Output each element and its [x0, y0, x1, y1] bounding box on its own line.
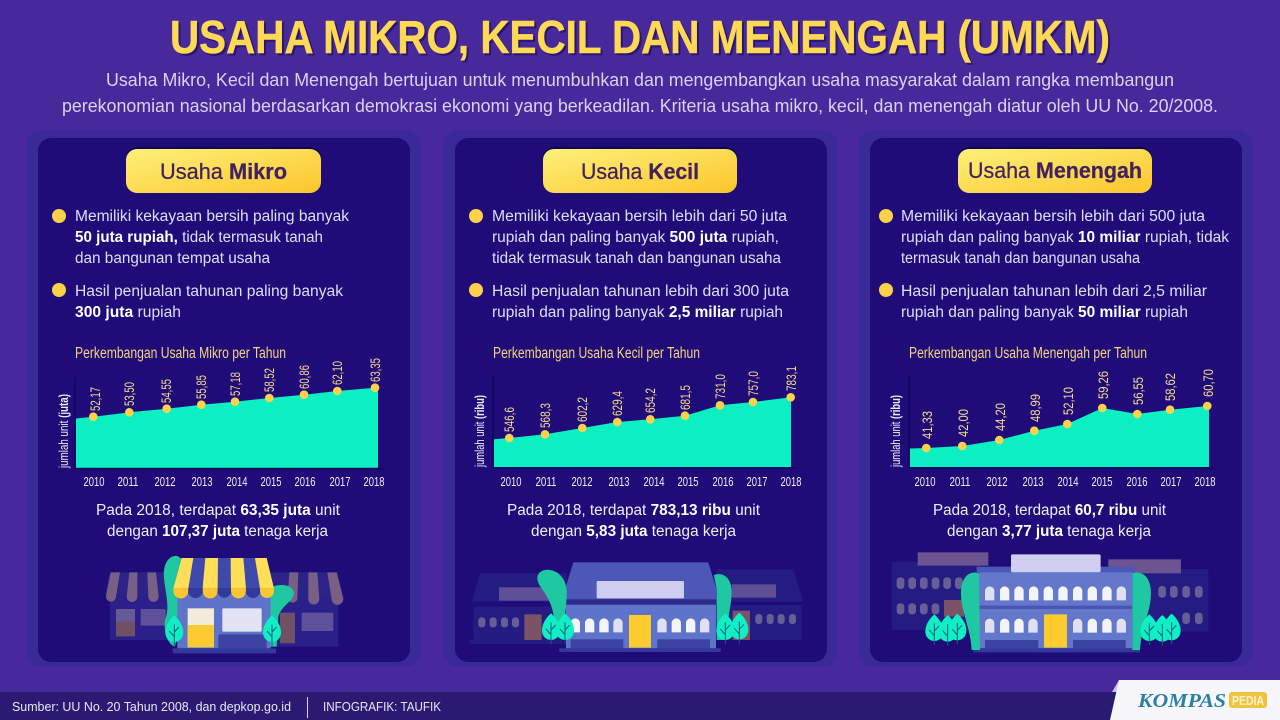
title: USAHA MIKRO, KECIL DAN MENENGAH (UMKM) [170, 11, 1110, 63]
panel: usaha kecil [443, 130, 838, 667]
area chart: menengah: 2014 [1058, 474, 1078, 489]
bullet: kekayaan mikro [52, 208, 349, 267]
bullet: kekayaan kecil: Memiliki kekayaan bersih lebih dari 50 juta [492, 208, 787, 225]
area chart: mikro: 53,50 [121, 382, 137, 406]
badge: usaha menengah: Usaha Menengah [968, 158, 1142, 183]
bullet: kekayaan kecil: tidak termasuk tanah dan bangunan usaha [492, 250, 781, 267]
bullet: kekayaan menengah: termasuk tanah dan bangunan usaha [901, 250, 1140, 267]
arched windows [985, 586, 1126, 633]
area chart: menengah: 2016 [1126, 474, 1148, 489]
bullet: penjualan menengah [879, 283, 1207, 321]
bullet: kekayaan mikro: Memiliki kekayaan bersih paling banyak [75, 208, 349, 225]
area chart: kecil: 2016 [712, 474, 734, 489]
logo: kompas pedia [1110, 680, 1280, 720]
bullet: penjualan mikro: Hasil penjualan tahunan paling banyak [75, 283, 343, 300]
window [222, 608, 262, 632]
area chart: menengah: 56,55 [1130, 377, 1146, 405]
door [188, 608, 214, 647]
summary: mikro: Pada 2018, terdapat 63,35 juta unit [96, 502, 341, 519]
area chart: kecil: 2015 [678, 474, 698, 489]
footer bar [0, 692, 1125, 720]
area chart: mikro: 2010 [84, 474, 104, 489]
chart title: kecil: Perkembangan Usaha Kecil per Tahun [493, 345, 700, 362]
area chart: menengah: 2010 [914, 474, 936, 489]
area chart: menengah: 2011 [950, 474, 970, 489]
tree left [165, 615, 183, 646]
area chart: mikro: 2014 [226, 474, 248, 489]
area chart: kecil: 2013 [608, 474, 630, 489]
area chart: menengah: 2013 [1022, 474, 1044, 489]
badge: usaha menengah [958, 147, 1152, 193]
credit text: INFOGRAFIK: TAUFIK [323, 700, 442, 714]
area chart: menengah: 41,33 [919, 411, 935, 439]
summary: mikro: dengan 107,37 juta tenaga kerja [107, 523, 328, 540]
door [629, 615, 651, 648]
bullet: kekayaan mikro: 50 juta rupiah, tidak termasuk tanah [75, 229, 323, 246]
arched windows [571, 618, 709, 632]
area chart: mikro: 57,18 [227, 372, 243, 396]
chart title: mikro: Perkembangan Usaha Mikro per Tahun [75, 345, 286, 362]
bullet: penjualan mikro [52, 283, 343, 321]
area chart: kecil: 2018 [780, 474, 802, 489]
area chart: mikro: 2015 [260, 474, 282, 489]
panel: usaha mikro [26, 130, 421, 667]
intro text: Usaha Mikro, Kecil dan Menengah bertujuan untuk menumbuhkan dan mengembangkan usaha masyarakat dalam rangka membangun [106, 70, 1174, 90]
roof and sign [977, 554, 1135, 573]
summary: menengah: Pada 2018, terdapat 60,7 ribu unit [933, 502, 1167, 519]
tree right [263, 615, 281, 646]
roof and sign [562, 562, 720, 600]
area chart: mikro: 55,85 [193, 375, 209, 399]
plant: left leaf [537, 570, 567, 633]
area chart: kecil: 602,2 [574, 397, 590, 422]
area chart: kecil: 2012 [572, 474, 592, 489]
area chart: mikro: 2011 [118, 474, 138, 489]
area chart: mikro: 62,10 [329, 361, 345, 385]
logo: kompas pedia: KOMPAS [1137, 690, 1226, 712]
area chart: mikro: 2012 [154, 474, 176, 489]
panel: usaha menengah [858, 130, 1253, 667]
summary: menengah: dengan 3,77 juta tenaga kerja [947, 523, 1151, 540]
area chart: kecil: 783,1 [783, 366, 799, 391]
badge: usaha mikro: Usaha Mikro [160, 159, 287, 184]
bullet: kekayaan kecil [469, 208, 787, 267]
bullet: kekayaan menengah [879, 208, 1229, 267]
trees left [542, 613, 574, 644]
intro text: perekonomian nasional berdasarkan demokrasi ekonomi yang berkeadilan. Kriteria usaha mikro, kecil, dan menengah diatur oleh UU No. 20/2008. [62, 96, 1218, 116]
summary: kecil: Pada 2018, terdapat 783,13 ribu unit [507, 502, 761, 519]
area chart: kecil: 681,5 [677, 385, 693, 410]
illustration: small shop [105, 556, 344, 653]
area chart: menengah [889, 369, 1216, 489]
area chart: mikro: 2013 [192, 474, 212, 489]
plant: left leaf [164, 556, 183, 647]
area chart: menengah: 2012 [986, 474, 1008, 489]
plant: right leaf [1132, 572, 1151, 650]
plant: right leaf [270, 585, 294, 647]
area chart: kecil: 2017 [746, 474, 768, 489]
area chart: menengah: 59,26 [1095, 371, 1111, 399]
area chart: mikro: 60,86 [296, 365, 312, 389]
chart title: menengah: Perkembangan Usaha Menengah per Tahun [909, 345, 1147, 362]
area chart: kecil: 757,0 [745, 371, 761, 396]
summary: menengah [933, 502, 1167, 540]
area chart: menengah: 2018 [1194, 474, 1216, 489]
area chart: mikro: 2017 [330, 474, 350, 489]
area chart: mikro: jumlah unit (juta) [57, 394, 71, 469]
area chart: mikro: 54,55 [158, 379, 174, 403]
bullet: penjualan kecil: Hasil penjualan tahunan lebih dari 300 juta [492, 283, 789, 300]
area chart: kecil: 2011 [536, 474, 556, 489]
area chart: kecil: 629,4 [609, 391, 625, 416]
area chart: menengah: 58,62 [1162, 373, 1178, 401]
area chart: menengah: 52,10 [1060, 387, 1076, 415]
area chart: kecil: 2014 [644, 474, 664, 489]
area chart: mikro: 63,35 [367, 358, 383, 382]
area chart: menengah: 48,99 [1027, 394, 1043, 422]
awning [173, 558, 274, 598]
area chart: kecil [473, 366, 802, 489]
area chart: mikro: 58,52 [261, 368, 277, 392]
door [1044, 614, 1067, 648]
area chart: menengah: jumlah unit (ribu) [889, 395, 903, 468]
area chart: menengah: 60,70 [1200, 369, 1216, 397]
intro text [62, 70, 1218, 116]
bullet: kekayaan menengah: Memiliki kekayaan bersih lebih dari 500 juta [901, 208, 1205, 225]
area chart: mikro: 2018 [364, 474, 384, 489]
bullet: penjualan kecil [469, 283, 789, 321]
plant: right leaf [714, 574, 732, 640]
illustration: small business building [469, 562, 803, 652]
area chart: kecil: 2010 [500, 474, 522, 489]
area chart: kecil: jumlah unit (ribu) [473, 395, 487, 468]
bullet: kekayaan kecil: rupiah dan paling banyak 500 juta rupiah, [492, 229, 779, 246]
bullet: kekayaan mikro: dan bangunan tempat usaha [75, 250, 270, 267]
area chart: kecil: 731,0 [712, 374, 728, 399]
badge: usaha mikro [126, 147, 321, 193]
summary: kecil: dengan 5,83 juta tenaga kerja [531, 523, 736, 540]
trees right [716, 613, 748, 644]
area chart: mikro [57, 358, 384, 489]
logo: kompas pedia: PEDIA [1232, 694, 1264, 708]
area chart: menengah: 44,20 [992, 403, 1008, 431]
badge: usaha kecil [543, 147, 737, 193]
plant: left leaf [961, 572, 980, 650]
bullet: penjualan menengah: Hasil penjualan tahunan lebih dari 2,5 miliar [901, 283, 1207, 300]
bullet: penjualan kecil: rupiah dan paling banyak 2,5 miliar rupiah [492, 304, 783, 321]
summary: kecil [507, 502, 761, 540]
area chart: mikro: 52,17 [87, 387, 103, 411]
area chart: menengah: 2015 [1092, 474, 1112, 489]
trees left [925, 614, 966, 646]
bullet: kekayaan menengah: rupiah dan paling banyak 10 miliar rupiah, tidak [901, 229, 1229, 246]
area chart: menengah: 42,00 [955, 409, 971, 437]
area chart: menengah: 2017 [1160, 474, 1182, 489]
trees right [1140, 614, 1181, 646]
bullet: penjualan mikro: 300 juta rupiah [75, 304, 181, 321]
source text: Sumber: UU No. 20 Tahun 2008, dan depkop.go.id [12, 700, 291, 714]
bullet: penjualan menengah: rupiah dan paling banyak 50 miliar rupiah [901, 304, 1188, 321]
area chart: mikro: 2016 [294, 474, 316, 489]
badge: usaha kecil: Usaha Kecil [581, 159, 699, 184]
area chart: kecil: 654,2 [642, 388, 658, 413]
illustration: medium building [892, 552, 1208, 652]
area chart: kecil: 546,6 [501, 407, 517, 432]
area chart: kecil: 568,3 [537, 403, 553, 428]
summary: mikro [96, 502, 341, 540]
